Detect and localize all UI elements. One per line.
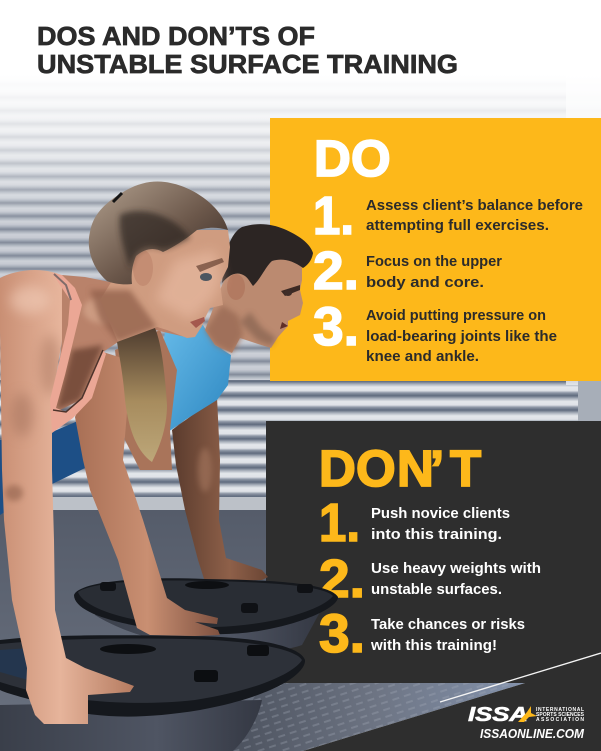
do item 3: load-bearing joints like the xyxy=(366,329,557,345)
ponytail xyxy=(117,328,167,462)
don't item 2: unstable surfaces. xyxy=(371,582,502,598)
woman front arm and hand xyxy=(0,270,134,724)
gym floor xyxy=(0,510,525,751)
man skin behind ponytail xyxy=(115,330,177,470)
back balance dome xyxy=(74,578,338,652)
do item 1 xyxy=(313,186,583,246)
hair tie xyxy=(113,193,122,202)
bottom dark corner xyxy=(303,683,601,751)
don't item 1: into this training. xyxy=(371,527,502,543)
woman pants xyxy=(0,418,85,515)
white diagonal line xyxy=(440,653,601,702)
do item 2 xyxy=(313,241,502,301)
icon: logo star xyxy=(518,706,537,722)
title: UNSTABLE SURFACE TRAINING xyxy=(37,49,458,79)
woman facial features xyxy=(190,258,224,328)
man shirt xyxy=(160,325,231,432)
don't item 3: 3. xyxy=(319,604,365,664)
don't item 1 xyxy=(319,493,510,553)
title: DOS AND DON’TS OF xyxy=(37,21,315,51)
don't item 3: Take chances or risks xyxy=(371,617,525,633)
do item 3: knee and ankle. xyxy=(366,349,479,365)
background: gym shutter wall xyxy=(0,0,601,511)
do item 3: 3. xyxy=(313,297,359,357)
man facial features xyxy=(280,285,300,329)
title xyxy=(37,21,458,79)
do item 3: Avoid putting pressure on xyxy=(366,308,546,324)
don't item 3: with this training! xyxy=(370,638,497,654)
heading: don't: DON’T xyxy=(319,440,481,497)
don't item 2 xyxy=(319,549,541,609)
do item 2: Focus on the upper xyxy=(366,254,502,270)
front balance dome xyxy=(0,635,305,751)
panel: don't xyxy=(266,421,601,683)
back disc xyxy=(74,578,338,634)
issa logo xyxy=(468,704,585,741)
man arm xyxy=(172,397,268,582)
woman back arm and hand xyxy=(75,352,220,636)
issa logo: INTERNATIONAL xyxy=(536,707,584,713)
do item 1: 1. xyxy=(313,186,354,246)
woman torso and neck xyxy=(54,275,190,413)
do item 2: 2. xyxy=(313,241,359,301)
man hair xyxy=(222,224,313,286)
don't item 2: Use heavy weights with xyxy=(371,561,541,577)
don't item 1: 1. xyxy=(319,493,360,553)
front disc xyxy=(0,635,305,717)
pink top xyxy=(50,273,106,433)
do item 3 xyxy=(313,297,557,365)
do item 1: Assess client’s balance before xyxy=(366,198,583,214)
don't item 3 xyxy=(319,604,525,664)
website: ISSAONLINE.COM xyxy=(480,726,585,741)
woman head xyxy=(89,182,230,462)
man head xyxy=(205,224,313,353)
issa logo: ISSA xyxy=(468,704,528,726)
do item 2: body and core. xyxy=(366,275,484,291)
woman ear xyxy=(133,250,153,286)
woman hair xyxy=(89,182,228,284)
issa logo: SPORTS SCIENCES xyxy=(536,712,585,718)
don't item 1: Push novice clients xyxy=(371,506,510,522)
do item 1: attempting full exercises. xyxy=(366,218,549,234)
issa logo: ASSOCIATION xyxy=(536,717,584,723)
heading: do: DO xyxy=(314,130,391,187)
don't item 2: 2. xyxy=(319,549,365,609)
panel: do xyxy=(270,118,601,381)
